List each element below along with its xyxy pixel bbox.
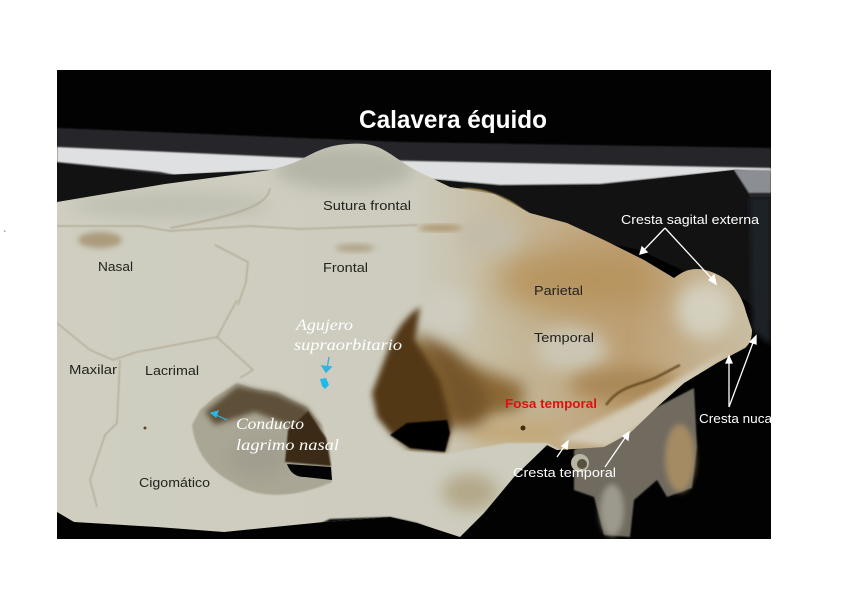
infographic canvas (4, 70, 771, 539)
opening: upper shadow (205, 386, 320, 430)
label: Nasal: Nasal (98, 259, 133, 274)
label: Parietal: Parietal (534, 283, 583, 298)
label: Maxilar: Maxilar (69, 362, 118, 377)
occipital condyle and jaw fragment (571, 388, 697, 537)
orbit black opening (390, 420, 450, 452)
label: Lacrimal: Lacrimal (145, 363, 199, 378)
opening: inner floor (254, 457, 262, 462)
label: Conducto lagrimo nasal: Conducto (236, 416, 304, 433)
arrows: Cresta sagital externa (640, 228, 716, 284)
arrow: Conducto lagrimo nasal (211, 411, 227, 420)
background white strip (57, 147, 771, 185)
shading: left top (70, 191, 270, 219)
arch bone (390, 442, 560, 537)
arrows: Cresta nuca (726, 336, 756, 407)
background dark table (57, 163, 771, 320)
label: Cresta sagital externa: Cresta sagital externa (621, 212, 760, 227)
orbit shadow soft edge (415, 335, 490, 425)
shading: temporal highlight (534, 328, 606, 372)
shading: top of skull (275, 146, 415, 190)
arch tan patch (442, 474, 498, 510)
label: Cresta nuca: Cresta nuca (699, 411, 773, 426)
opening: black hole (287, 464, 332, 480)
background right grey wedge (734, 170, 771, 193)
shading: nasal spot (78, 232, 122, 248)
label: Agujero supraorbitario (294, 317, 402, 354)
label: Sutura frontal: Sutura frontal (323, 198, 411, 213)
shading: pale orbit rim (434, 291, 472, 333)
lower jaw shadow (321, 516, 432, 528)
label: Agujero supraorbitario: Agujero (295, 317, 353, 334)
lower crest pale (560, 350, 730, 447)
shading: tan fossa (410, 335, 525, 425)
skull bone (57, 140, 771, 540)
label: Agujero supraorbitario: supraorbitario (294, 337, 402, 354)
label: Frontal: Frontal (323, 260, 368, 275)
nasolacrimal opening (192, 383, 332, 495)
label: Fosa temporal: Fosa temporal (505, 396, 597, 411)
photo: equine skull (57, 70, 773, 540)
label: Conducto lagrimo nasal (236, 416, 340, 454)
background band (57, 128, 771, 200)
shading: tan parietal (495, 248, 665, 312)
background right lower shade (750, 197, 771, 345)
fossa crack (606, 365, 680, 405)
arrow: Agujero supraorbitario (322, 357, 331, 372)
marker: foramen dot (320, 378, 329, 389)
sutures (57, 188, 417, 507)
skull ridge behind (458, 187, 528, 212)
opening: dark brown (285, 411, 331, 466)
title: Calavera équido (359, 106, 547, 134)
orbit shadow (372, 307, 452, 452)
arrows: Cresta temporal (557, 432, 629, 467)
label: Cigomático: Cigomático (139, 475, 210, 490)
label: Temporal: Temporal (534, 330, 594, 345)
stray mark: ` (3, 229, 6, 241)
label: Cresta temporal: Cresta temporal (513, 465, 616, 480)
label: Conducto lagrimo nasal: lagrimo nasal (236, 437, 340, 454)
